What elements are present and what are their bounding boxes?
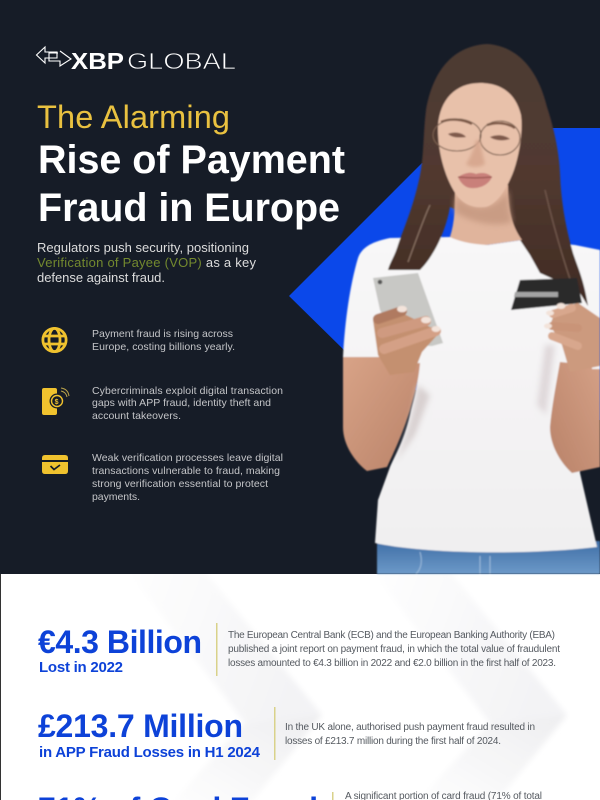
stat: 213.7 million (38, 707, 535, 761)
white t-shirt (343, 237, 600, 552)
text: weak verification: payments. (92, 491, 140, 503)
text: cybercriminals: Cybercriminals exploit digital transaction (92, 385, 283, 397)
subtitle: defense against fraud. (37, 270, 165, 285)
logo wordmark: XBP (71, 48, 124, 74)
title: Fraud in Europe (38, 186, 340, 230)
stat: 213.7 million: In the UK alone, authorised push payment fraud resulted in (285, 722, 535, 733)
text: weak verification: transactions vulnerable to fraud, making (92, 465, 280, 477)
subtitle (37, 240, 256, 285)
text: cybercriminals: account takeovers. (92, 410, 181, 422)
glasses (433, 119, 520, 155)
neck (450, 185, 522, 245)
text: cybercriminals (92, 385, 283, 422)
lips (458, 173, 492, 188)
text: weak verification (92, 452, 283, 503)
stat: 4.3 billion: published a joint report on payment fraud, in which the total value of fraudulent (228, 644, 560, 655)
title: Rise of Payment (38, 138, 345, 182)
phone hand (373, 312, 440, 375)
stat: 4.3 billion: Lost in 2022 (39, 659, 123, 676)
logo: XBP Global: GLOBAL (127, 48, 236, 74)
text: fraud rising: Europe, costing billions yearly. (92, 341, 235, 353)
stat: 213.7 million: £213.7 Million (38, 708, 243, 744)
eyes (448, 133, 466, 138)
text: weak verification: Weak verification processes leave digital (92, 452, 283, 464)
hair (388, 44, 588, 306)
illustration: woman with phone and card (343, 44, 600, 574)
icon: globe (43, 328, 66, 352)
title (37, 99, 345, 230)
left arm (343, 357, 420, 471)
jeans (377, 541, 600, 574)
stat: 213.7 million: losses of £213.7 million during the first half of 2024. (285, 736, 501, 747)
panel: dark hero background (0, 0, 600, 574)
logo: XBP Global (36, 47, 236, 74)
face (438, 83, 522, 207)
text: weak verification: strong verification essential to protect (92, 478, 268, 490)
subtitle: Regulators push security, positioning (37, 240, 249, 255)
panel: white statistics background (0, 574, 564, 800)
nose (466, 140, 485, 167)
logo icon (36, 47, 71, 66)
card (511, 278, 582, 310)
shirt shadows (396, 385, 430, 462)
stat: 4.3 billion (38, 623, 560, 676)
phone (373, 273, 443, 346)
right sleeve cuff (592, 358, 600, 369)
blue diamond shape behind woman (289, 128, 600, 420)
stat: 4.3 billion: losses amounted to €4.3 billion in 2022 and €2.0 billion in the first half of 2023. (228, 658, 556, 669)
text: fraud rising (92, 328, 235, 353)
subtitle: Verification of Payee (VOP) as a key (37, 255, 256, 270)
right arm (550, 362, 600, 473)
icon: verified card (42, 455, 68, 474)
eyebrows (441, 120, 472, 124)
stat: 71 percent of card fraud (38, 791, 542, 800)
stat: 4.3 billion: €4.3 Billion (38, 624, 202, 660)
stat: 4.3 billion: The European Central Bank (ECB) and the European Banking Authority (EBA) (228, 630, 555, 641)
title: The Alarming (37, 99, 230, 135)
icon: phone with coin: $ (55, 399, 59, 406)
text: cybercriminals: gaps with APP fraud, identity theft and (92, 397, 271, 409)
icon: phone with coin (42, 388, 69, 415)
card hand (550, 303, 600, 372)
stat: 213.7 million: in APP Fraud Losses in H1 2024 (39, 744, 261, 761)
text: fraud rising: Payment fraud is rising across (92, 328, 233, 340)
